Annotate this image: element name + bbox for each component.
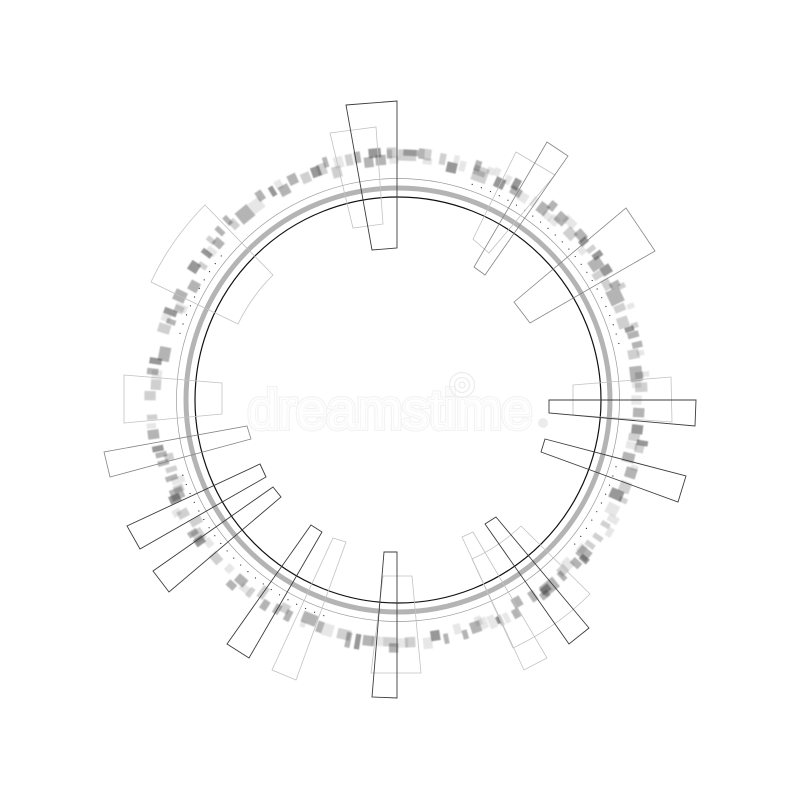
- outer thin ring: [176, 178, 620, 622]
- grey ring: [186, 188, 610, 612]
- inner black ring: [195, 197, 601, 603]
- dotted arcs: [180, 184, 619, 616]
- medium frames: [104, 142, 655, 477]
- mosaic ring: upper left: [158, 148, 396, 334]
- watermark: dreamstime: [248, 380, 532, 440]
- mosaic ring: right: [601, 316, 649, 537]
- light frames: [124, 127, 672, 680]
- watermark: dreamstime: [248, 380, 532, 440]
- watermark: dreamstime: [248, 380, 532, 440]
- mosaic ring: bottom and lower left: [204, 538, 398, 652]
- mosaic ring: left: [145, 347, 206, 546]
- mosaic ring: upper right: [390, 149, 634, 313]
- mosaic ring: lower right: [397, 533, 603, 649]
- dark frames: [127, 101, 696, 698]
